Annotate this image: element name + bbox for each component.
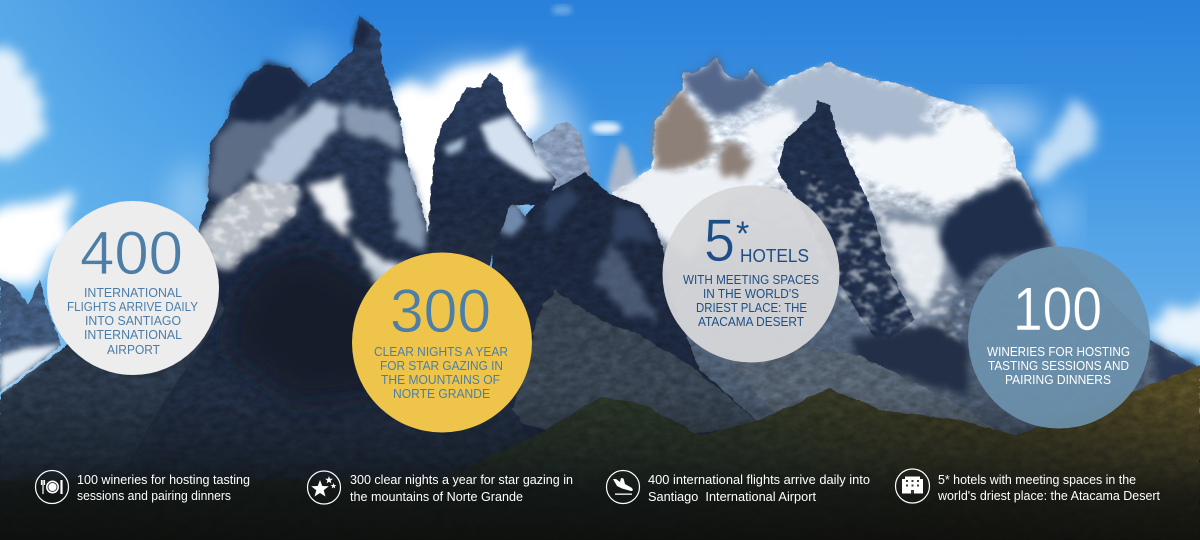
caption: INTERNATIONAL bbox=[84, 286, 182, 300]
icon: plate and cutlery bbox=[36, 470, 68, 504]
clouds bbox=[0, 5, 1200, 360]
number 5 star: * bbox=[736, 215, 749, 253]
caption: CLEAR NIGHTS A YEAR bbox=[374, 345, 508, 359]
caption: DRIEST PLACE: THE bbox=[696, 301, 807, 315]
footer item: wineries bbox=[36, 470, 250, 504]
footer item: flights: Santiago International Airport bbox=[648, 490, 816, 504]
stat circle: 300 clear nights bbox=[352, 252, 532, 432]
caption: THE MOUNTAINS OF bbox=[381, 373, 500, 387]
caption: ATACAMA DESERT bbox=[698, 315, 804, 329]
caption: FOR STAR GAZING IN bbox=[380, 359, 503, 373]
caption bbox=[683, 273, 819, 329]
stat circle: 400 flights bbox=[47, 201, 219, 375]
text: 400 international flights arrive daily into bbox=[648, 473, 870, 487]
distant hazy peaks bbox=[533, 122, 636, 200]
text: 300 clear nights a year for star gazing in bbox=[350, 473, 573, 487]
number 5 star: HOTELS bbox=[740, 246, 809, 266]
second tower bbox=[427, 72, 557, 320]
sky bbox=[0, 0, 1200, 420]
caption bbox=[987, 345, 1130, 387]
caption: IN THE WORLD'S bbox=[703, 287, 799, 301]
right massif bbox=[600, 58, 1200, 450]
number 300: 300 bbox=[390, 277, 491, 345]
number 5 star: 5 bbox=[704, 207, 735, 274]
dark bottom fade bbox=[0, 390, 1200, 540]
left tower and dark slope bbox=[0, 16, 570, 540]
foreground hills bbox=[0, 365, 1200, 540]
caption: WITH MEETING SPACES bbox=[683, 273, 819, 287]
footer item: hotels bbox=[896, 469, 1160, 503]
number 400: 400 bbox=[80, 219, 183, 287]
number 5 star bbox=[704, 207, 809, 274]
text: 5* hotels with meeting spaces in the bbox=[938, 473, 1136, 487]
footer item: hotels: world's driest place: the Atacama Desert bbox=[937, 489, 1160, 503]
footer item: wineries: sessions and pairing dinners bbox=[77, 489, 231, 503]
caption: INTERNATIONAL bbox=[84, 328, 182, 342]
far-left small peaks bbox=[0, 278, 62, 392]
caption: TASTING SESSIONS AND bbox=[988, 359, 1129, 373]
caption: FLIGHTS ARRIVE DAILY bbox=[67, 300, 199, 314]
stat circle: 100 wineries bbox=[968, 246, 1150, 428]
caption: AIRPORT bbox=[107, 343, 160, 357]
footer item: clear nights bbox=[308, 471, 573, 504]
icon: landing plane bbox=[606, 470, 640, 504]
caption: INTO SANTIAGO bbox=[85, 314, 181, 328]
caption bbox=[374, 345, 508, 401]
middle dark range bbox=[480, 172, 762, 460]
caption: WINERIES FOR HOSTING bbox=[987, 345, 1130, 359]
caption bbox=[67, 286, 199, 357]
icon: hotel building bbox=[896, 469, 930, 503]
footer item: clear nights: the mountains of Norte Grande bbox=[350, 490, 523, 504]
caption: PAIRING DINNERS bbox=[1005, 373, 1111, 387]
number 100: 100 bbox=[1013, 275, 1102, 343]
text: 100 wineries for hosting tasting bbox=[77, 473, 250, 487]
stat circle: 5 star hotels bbox=[662, 186, 840, 362]
icon: stars bbox=[308, 471, 340, 504]
caption: NORTE GRANDE bbox=[393, 387, 490, 401]
footer item: flights bbox=[606, 470, 870, 504]
